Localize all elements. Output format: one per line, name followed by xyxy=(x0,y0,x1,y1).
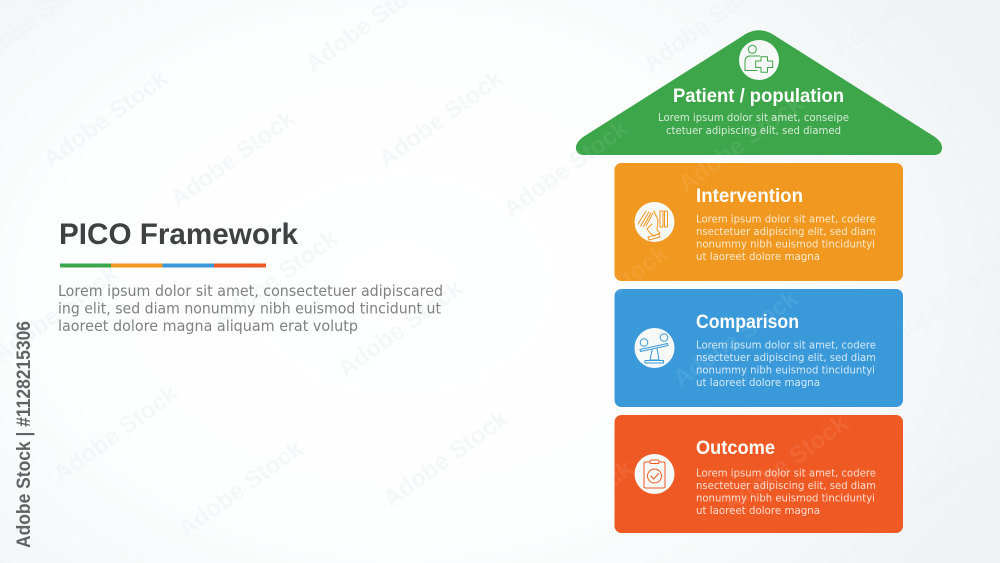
heading: Outcome xyxy=(696,437,775,459)
text: Lorem ipsum dolor sit amet, codere xyxy=(696,468,876,480)
watermark pattern: Adobe Stock xyxy=(373,65,508,173)
text: ut laoreet dolore magna xyxy=(696,251,820,263)
text: nsectetuer adipiscing elit, sed diam xyxy=(696,226,876,238)
watermark pattern: Adobe Stock xyxy=(333,275,468,383)
text xyxy=(658,112,849,137)
watermark pattern: Adobe Stock xyxy=(378,405,513,513)
heading: Comparison xyxy=(696,311,799,333)
title: PICO Framework xyxy=(59,218,298,251)
watermark over panels: Adobe Stock xyxy=(498,115,633,223)
text: Lorem ipsum dolor sit amet, codere xyxy=(696,340,876,352)
text: Lorem ipsum dolor sit amet, conseipe xyxy=(658,112,849,124)
watermark over panels xyxy=(498,90,853,563)
text xyxy=(696,468,876,517)
heading: Intervention xyxy=(696,185,803,207)
text: nsectetuer adipiscing elit, sed diam xyxy=(696,352,876,364)
description: laoreet dolore magna aliquam erat volutp xyxy=(58,317,358,335)
watermark pattern: Adobe Stock xyxy=(498,115,633,223)
text: ctetuer adipiscing elit, sed diamed xyxy=(666,125,841,137)
text: nonummy nibh euismod tinciduntyi xyxy=(696,492,875,504)
heading: Patient / population xyxy=(673,85,844,107)
description: Lorem ipsum dolor sit amet, consectetuer adipiscared xyxy=(58,282,443,300)
watermark pattern: Adobe Stock xyxy=(843,455,978,563)
text: ut laoreet dolore magna xyxy=(696,377,820,389)
watermark over panels: Adobe Stock xyxy=(503,455,638,563)
text xyxy=(696,214,876,263)
panel: comparison xyxy=(614,289,903,407)
text xyxy=(696,340,876,389)
icon: clipboard with check xyxy=(634,454,674,494)
panel: patient / population roof xyxy=(576,30,942,155)
text: nonummy nibh euismod tinciduntyi xyxy=(696,364,875,376)
watermark over panels: Adobe Stock xyxy=(673,90,808,198)
watermark over panels: Adobe Stock xyxy=(538,240,673,348)
text: nonummy nibh euismod tinciduntyi xyxy=(696,238,875,250)
text: ut laoreet dolore magna xyxy=(696,505,820,517)
watermark over panels: Adobe Stock xyxy=(668,285,803,393)
watermark pattern: Adobe Stock xyxy=(165,105,300,213)
watermark pattern: Adobe Stock xyxy=(208,225,343,333)
watermark pattern: Adobe Stock xyxy=(48,380,183,488)
icon: hand pushing dominoes xyxy=(634,202,674,242)
description: ing elit, sed diam nonummy nibh euismod tincidunt ut xyxy=(58,300,441,318)
panel: intervention xyxy=(614,163,903,281)
watermark over panels: Adobe Stock xyxy=(718,410,853,518)
icon: patient with plus xyxy=(739,40,779,80)
watermark pattern: Adobe Stock xyxy=(38,65,173,173)
watermark pattern: Adobe Stock xyxy=(173,435,308,543)
vertical stock id: Adobe Stock | #1128215306 xyxy=(14,321,35,548)
text: nsectetuer adipiscing elit, sed diam xyxy=(696,480,876,492)
title underline xyxy=(60,264,266,268)
description xyxy=(58,282,443,335)
panel: outcome xyxy=(614,415,903,533)
text: Lorem ipsum dolor sit amet, codere xyxy=(696,214,876,226)
icon: balance seesaw xyxy=(634,328,674,368)
